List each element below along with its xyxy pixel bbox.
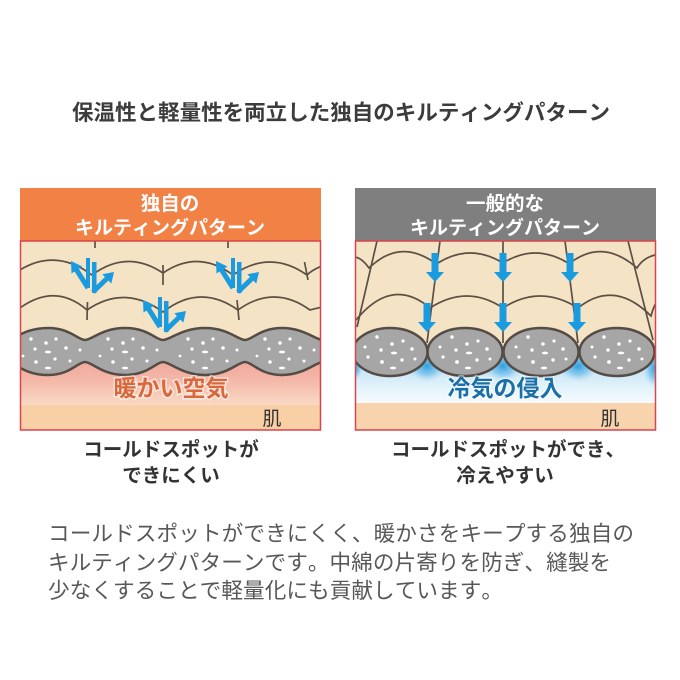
label: warm air: 暖かい空気 [114,375,228,401]
body text [48,521,634,603]
panel: common quilting pattern [347,188,667,430]
panel: unique quilting pattern [4,188,323,430]
diagram: unique quilting cross-section [4,241,323,430]
frame [20,241,320,430]
frame [356,241,656,430]
skin layer [356,403,655,430]
caption: right: 冷えやすい [456,465,554,487]
panel header: unique: キルティングパターン [75,216,265,239]
body text: 少なくすることで軽量化にも貢献しています。 [48,578,503,603]
label: skin: 肌 [262,409,282,430]
icon: blue arrows bouncing [71,258,259,332]
batting layer [7,328,323,375]
icon: blue cold arrows [418,253,586,332]
panel header: unique [20,188,321,241]
title: 保温性と軽量性を両立した独自のキルティングパターン [72,100,610,125]
warm air layer [21,363,320,405]
caption: right: コールドスポットができ、 [391,438,625,461]
quilting seam lines [4,241,322,320]
body text: キルティングパターンです。中綿の片寄りを防ぎ、縫製を [48,550,611,575]
panel header: common: 一般的な [466,193,544,215]
label: skin: 肌 [600,409,620,430]
quilting seam lines [355,241,656,343]
caption: left: コールドスポットが [83,438,259,461]
panel header: common [355,188,656,241]
cold air layer [356,357,655,403]
label: cold air intrusion: 冷気の侵入 [448,375,562,401]
panel header: common: キルティングパターン [410,216,600,239]
skin layer [21,405,320,430]
caption: left: できにくい [122,465,220,487]
panel header: unique: 独自の [141,193,199,215]
batting layer [352,328,654,376]
diagram: common quilting cross-section [347,241,667,430]
body text: コールドスポットができにくく、暖かさをキープする独自の [48,521,634,546]
